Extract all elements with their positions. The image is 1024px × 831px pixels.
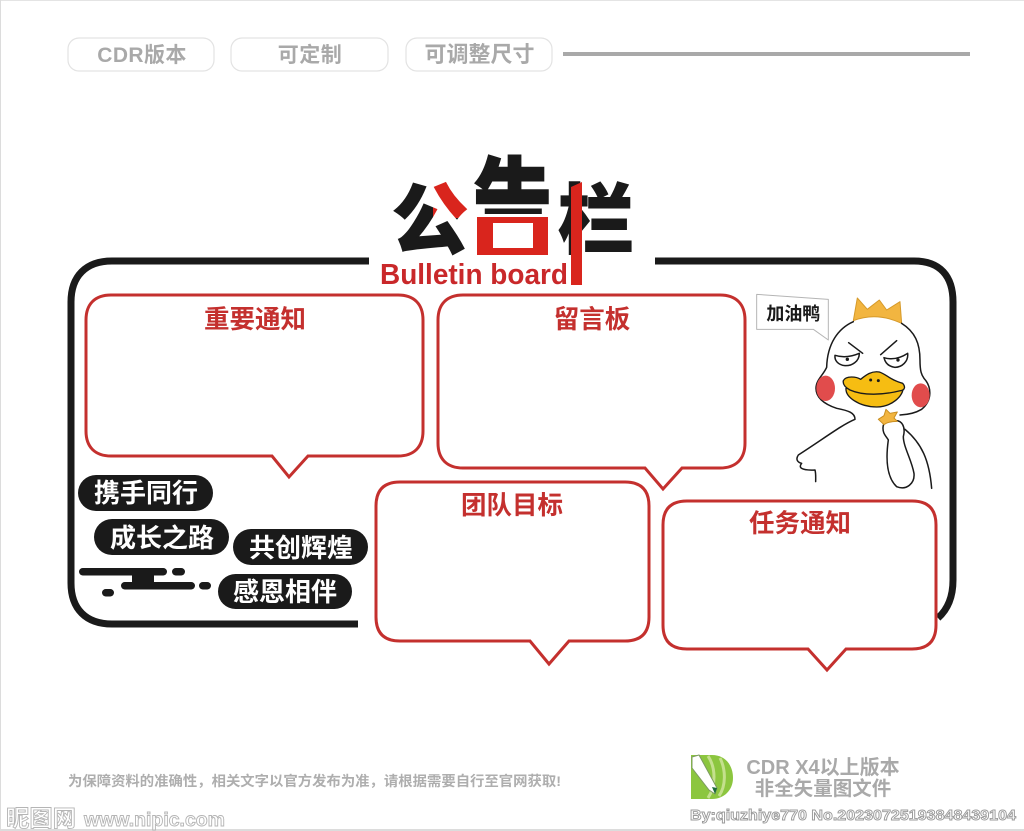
- panel: 团队目标: 团队目标: [461, 492, 563, 520]
- icon: CorelDRAW logo: [691, 755, 733, 799]
- title: 栏: [558, 179, 634, 264]
- character: duck mascot: [757, 294, 932, 488]
- panel: 团队目标: [376, 482, 649, 664]
- panel: 留言板: [438, 295, 745, 489]
- tag: CDR版本: [68, 38, 214, 71]
- pill: 成长之路: [94, 519, 229, 555]
- pill: 感恩相伴: 感恩相伴: [233, 577, 337, 607]
- watermark: author: By:qiuzhiye770 No.20230725193848439104: [690, 807, 1017, 824]
- version note: CDR X4以上版本: [746, 756, 900, 779]
- version note: [746, 756, 900, 800]
- pill: 携手同行: [78, 475, 213, 511]
- beak: [846, 387, 903, 407]
- board frame: [71, 261, 953, 624]
- speech bubble: 加油鸭: [766, 304, 820, 324]
- arm: [883, 421, 914, 488]
- title: 公: [392, 179, 468, 264]
- panel: 任务通知: 任务通知: [749, 510, 851, 538]
- star: [878, 409, 897, 425]
- tag: 可调整尺寸: [406, 38, 552, 71]
- title: [380, 152, 634, 291]
- tag: CDR版本: CDR版本: [97, 44, 187, 67]
- pill: 感恩相伴: [218, 574, 352, 609]
- crown: [853, 298, 902, 323]
- panel: 任务通知: [663, 501, 936, 670]
- tag: 可定制: 可定制: [278, 43, 342, 67]
- panel: 重要通知: [86, 295, 423, 477]
- version note: 非全矢量图文件: [755, 777, 891, 800]
- disclaimer: 为保障资料的准确性，相关文字以官方发布为准，请根据需要自行至官网获取!: [68, 773, 561, 789]
- speech bubble: [757, 294, 828, 340]
- eyes and brows: [835, 353, 859, 366]
- pill: 共创辉煌: [233, 529, 368, 565]
- tag: 可定制: [231, 38, 388, 71]
- pill: 成长之路: 成长之路: [110, 523, 214, 553]
- panel: 留言板: 留言板: [554, 306, 630, 334]
- body and head outline: [797, 322, 932, 488]
- watermark: site: 昵图网: [6, 805, 76, 831]
- pill: 携手同行: 携手同行: [94, 478, 198, 508]
- watermark: site: [6, 805, 225, 831]
- pill: 共创辉煌: 共创辉煌: [249, 533, 353, 563]
- panel: 重要通知: 重要通知: [204, 306, 306, 334]
- watermark: site: www.nipic.com: [83, 810, 225, 831]
- subtitle: Bulletin board: [380, 259, 568, 291]
- icon: cloud strokes: [79, 568, 211, 596]
- cheeks: [816, 376, 835, 401]
- tag: 可调整尺寸: 可调整尺寸: [424, 42, 535, 67]
- title: 公: [392, 179, 468, 264]
- title: 告: [472, 152, 553, 263]
